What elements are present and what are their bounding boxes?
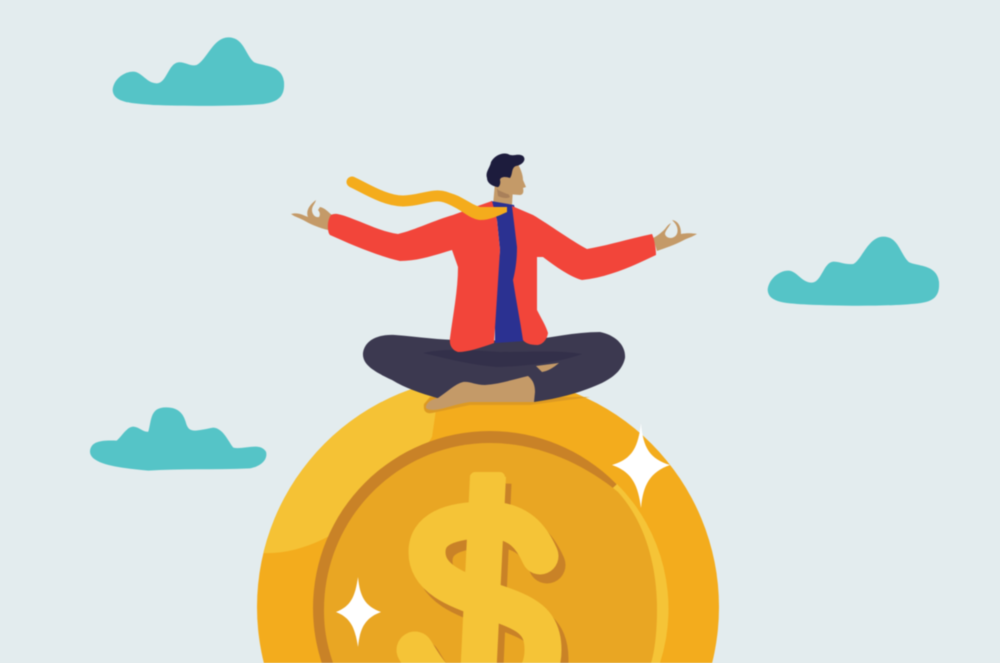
cloud: lower left bbox=[90, 407, 266, 471]
sparkle: small bbox=[336, 577, 381, 647]
dollar sign bbox=[415, 472, 543, 663]
businessman bbox=[291, 153, 697, 413]
jacket right bbox=[512, 206, 656, 345]
cloud: top left bbox=[113, 37, 284, 106]
neck shadow bbox=[497, 189, 510, 198]
front foot bbox=[426, 376, 535, 410]
coin bbox=[240, 376, 719, 663]
left hand bbox=[291, 200, 332, 230]
leg shadow on coin bbox=[424, 397, 590, 413]
crossed legs bbox=[363, 332, 625, 402]
leg shade bbox=[423, 350, 582, 367]
jacket left bbox=[328, 201, 500, 352]
coin rim light crescent bbox=[600, 484, 668, 663]
hair bbox=[487, 153, 524, 187]
neck bbox=[493, 183, 513, 205]
right hand bbox=[653, 220, 697, 251]
sparkle: large bbox=[612, 423, 670, 508]
coin body bbox=[257, 376, 719, 663]
coin highlight bbox=[264, 390, 436, 554]
coin rim shadow bbox=[313, 431, 667, 663]
small foot bbox=[536, 363, 559, 372]
tie bbox=[352, 182, 507, 220]
shirt bbox=[491, 201, 525, 343]
cloud: right bbox=[768, 237, 939, 306]
face bbox=[498, 164, 526, 195]
coin face bbox=[324, 443, 657, 663]
dollar sign shadow bbox=[422, 483, 550, 663]
